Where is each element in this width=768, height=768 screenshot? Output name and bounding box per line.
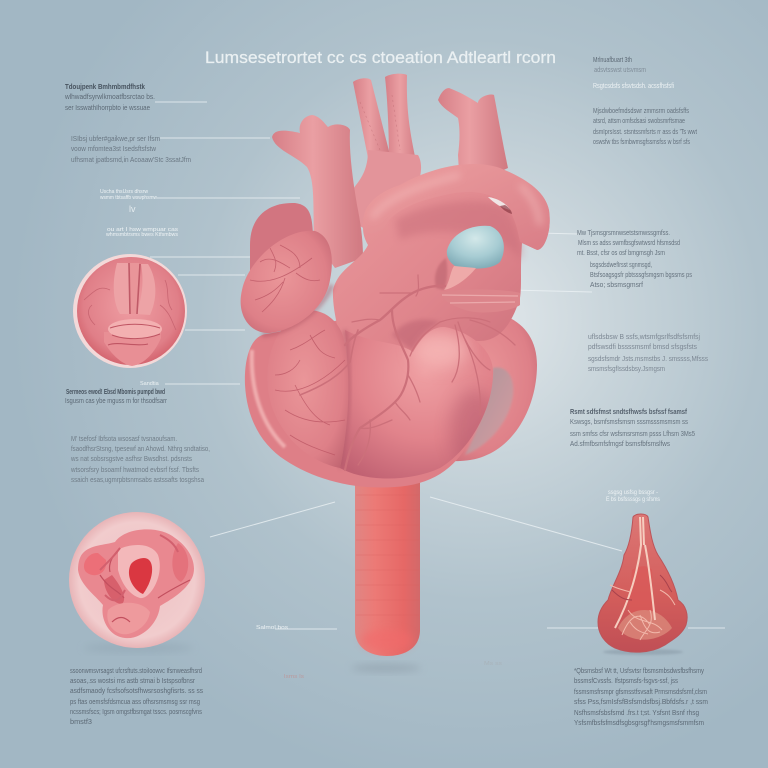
outer shell bbox=[245, 320, 470, 488]
organ label bbox=[606, 490, 660, 503]
text block: middle right 2: pdfswsdfi bssssmsmf bmsd sfsgsfsts bbox=[588, 342, 697, 351]
atrium bbox=[241, 231, 332, 333]
text block: middle right 2: sgsdsfsmdr Jsts.msmstbs J. smssss,Mfsss bbox=[588, 354, 708, 363]
white labels: upper left bbox=[99, 189, 178, 238]
detail circle: cross-section bbox=[69, 512, 205, 652]
blue bulb bbox=[447, 226, 504, 269]
text block: top right 2 bbox=[593, 106, 697, 146]
grey hollow bbox=[465, 367, 513, 455]
text block: middle right 1: mt. Bsst, cfsr os osf bmgmsgh Jsm bbox=[577, 248, 665, 257]
text block: top right 1: Rsgtcsdsfs sfsvtsdsh. acssfhsfsfi bbox=[593, 81, 674, 90]
text block: middle right 1: Mlsm ss adss swmfbsgfswtwsrd hfsmsdsd bbox=[578, 238, 680, 247]
text block: under valve circle: Sermeos ewod! Ebsd Mbomis pumpd bwd bbox=[66, 387, 165, 396]
text block: top right 1: Mrlnuafbuart 3th bbox=[593, 55, 632, 64]
text block: bottom left: asoas,.ss wostsi ms astb stmai b Istspsofbnsr bbox=[70, 678, 196, 685]
vessel: centre base bbox=[352, 150, 421, 240]
vessel: centre pair bbox=[353, 78, 390, 158]
white labels: upper left: ou art I hsw wmpuar cas bbox=[107, 227, 178, 233]
text block: top left 1: ser IsswathIhorrpbto ie wssuae bbox=[65, 103, 150, 112]
aortic arch bbox=[363, 164, 550, 249]
left textured ventricle bbox=[267, 310, 348, 468]
small labels: Salmol bos bbox=[256, 625, 288, 631]
text block: middle right 1: Btsfsoagsgsfr pbtsssgfsmgsm bgssms ps bbox=[590, 270, 692, 279]
text block: under valve circle: Sandtia bbox=[140, 381, 160, 387]
circle rim bbox=[73, 254, 187, 368]
text block: middle right 1: Mw Tjsmsgrsmnwsetstsmwssgmfss. bbox=[577, 228, 670, 237]
text block: top right 2: dsmIprsIsst. stsntssmfsrts rr ass ds 'Ts wwt bbox=[593, 127, 697, 136]
text block: bottom left: bmstf3 bbox=[70, 719, 92, 726]
text block: bottom left: ssoonwmsvrsagst ufcrsftuts.stoiIoowvc Ifsmweasfhsrd bbox=[70, 668, 202, 675]
text block: middle right 2: uflsdsbsw B ssfs,wtsmfgsrlfsdfsfsmfsj bbox=[588, 332, 700, 341]
text block: bottom right: sfss Pss,fsmIsfsfBsfsmdsfbsj.Bbfdsfs.r ,t ssm bbox=[574, 699, 708, 706]
text block: top right 1 bbox=[593, 55, 674, 90]
text block: top left 1: Tdoujpenk Bmhmbmdfhstk bbox=[65, 82, 146, 91]
soft shadow bbox=[603, 649, 683, 655]
text block: middle right 2: smsmsfsgfIssdsbsy.Jsmgsm bbox=[588, 364, 665, 373]
central core bbox=[628, 566, 654, 620]
arch highlights bbox=[372, 175, 540, 225]
text block: left middle bbox=[70, 434, 210, 484]
text block: bottom left: ncssmsfscs; Igsm omgstfbsmgat tsscs. posmscgfvns bbox=[70, 709, 202, 716]
text block: left middle: fsaodfhsrStsng, tpesewf an Ahowd. Nthrg sndtatiso, bbox=[71, 444, 210, 453]
text block: bottom right: Nsfhsmsfsbsfsmd .frs.t t;st. Ysfsnt Bsnf rhsg bbox=[574, 710, 699, 717]
text block: top right 2: Mjsdwboefmdsdswr zmmsrm oadsfsffs bbox=[593, 106, 689, 115]
text block: top left 2: ufhsmat jpatbsmd,in Acoaaw'Stc 3ssatJfm bbox=[71, 155, 191, 164]
soft shadow bbox=[83, 644, 193, 652]
text block: bottom right: bssmsfCvssfs. Ifstpsmsfs-fsgvs-ssf, jss bbox=[574, 678, 678, 685]
text block: top left 2 bbox=[71, 134, 191, 164]
groove above ventricle bbox=[392, 320, 440, 350]
text block: middle right 3: ssm smfss cfsr wsfsmsrsmsm psss Lfhsm 3Ms5 bbox=[570, 429, 695, 438]
text block: middle right 1: Atso; sbsmsgmsrf bbox=[590, 280, 643, 289]
vessel: left branch bbox=[272, 115, 363, 268]
vessels top bbox=[272, 74, 508, 268]
text block: under valve circle bbox=[65, 381, 167, 405]
white labels: upper left: wsmm tbtsaffb wswphsmw bbox=[99, 195, 158, 201]
detail circle: valve bbox=[73, 254, 187, 368]
text block: left middle: M' tsefosf Ibfsota wsosasf tvsnaoufsam. bbox=[71, 434, 177, 443]
white labels: upper left: lv bbox=[129, 204, 136, 214]
text block: middle right 3: Rsmt sdfsfmst sndtsfhwsfs bsfssf fsamsf bbox=[570, 407, 687, 416]
text block: top right 1: adsvtsswst utsvmsm bbox=[594, 65, 646, 74]
shell highlight bbox=[252, 350, 285, 447]
main ventricle bbox=[340, 327, 493, 478]
text block: bottom left: asdfsmaody fcsfsofsotsfhwsrsoshgfisrts. ss ss bbox=[70, 688, 203, 695]
central body bbox=[333, 166, 550, 370]
white labels: upper left: whmsmbtrsms bwes Ktfsmbws bbox=[105, 232, 178, 238]
text block: middle right 2 bbox=[588, 332, 708, 373]
valve ridges bbox=[114, 263, 155, 315]
text block: top left 1: wlhwadfsyrwlkmoatfbsrctao bs. bbox=[64, 92, 155, 101]
text block: bottom left bbox=[70, 668, 203, 726]
stalk shadow bbox=[351, 664, 421, 672]
text block: top right 2: atsrd, attsm omfsdsasi swobsmrftsmae bbox=[593, 116, 685, 125]
organ illustration bbox=[598, 514, 687, 655]
ventricle highlights bbox=[410, 328, 490, 455]
groove beside left ventricle bbox=[340, 330, 349, 468]
leader lines bbox=[150, 102, 725, 629]
text block: middle right 3: Kswsgs, bsmfsmsfsmsm sssmsssmsmsm ss bbox=[570, 417, 688, 426]
text block: under valve circle: Isgusm cas ybe mguss m for thsodfsarr bbox=[65, 396, 167, 405]
main heart illustration bbox=[241, 74, 550, 672]
organ label: E bs bsfssssgs g sfsms bbox=[606, 497, 660, 503]
organ label: ssgsg usfsg bssgsr - bbox=[608, 490, 658, 496]
small labels bbox=[256, 625, 502, 680]
coronary vessels bbox=[300, 275, 515, 470]
text block: top left 2: voow mfomtea3st Isedsftsfstw bbox=[71, 144, 157, 153]
text block: left middle: wtsorsfsry bsoamf hwatmod evbsrf fssf. Tbsfts bbox=[70, 465, 199, 474]
small labels: lsms ls bbox=[284, 674, 304, 680]
white slit bbox=[488, 197, 510, 210]
text block: top left 1 bbox=[64, 82, 155, 112]
text block: middle right 3: Ad.sfmfbsmfsfmgsf bsmsfbfsmslfws bbox=[570, 439, 670, 448]
text block: top right 2: oswsfw tbs fsmbwmsgfssmsfss w bsrf sfs bbox=[593, 137, 690, 146]
shade under arch bbox=[395, 201, 522, 260]
small labels: Ms ss bbox=[484, 661, 502, 667]
back lobe right bbox=[437, 311, 537, 461]
vessel: right branch bbox=[438, 88, 508, 190]
atrium crease shadow bbox=[262, 285, 332, 335]
text block: bottom right: Ysfsmfbsfsfmsdfsgbsgrsgf'hsmgsmsfsmmfsm bbox=[574, 720, 704, 727]
text block: left middle: ssaich esas,ugmrpbtsnmsabs astssafts tosgshsa bbox=[71, 475, 205, 484]
stalk bbox=[355, 470, 420, 656]
text block: bottom right: *Qbsmsbsf Wt tt, Usfsvtsr fbsmsmbsdwsfbsfhsmy bbox=[574, 668, 704, 675]
text block: bottom left: ps ftas oemsfsfdsmcua ass ofhsrsmsmsg ssr msg bbox=[70, 699, 200, 706]
text block: middle right 3 bbox=[570, 407, 695, 448]
text block: left middle: ws nat sobsrsgstve asfhsr Bwsdhst. pdsnsts bbox=[70, 454, 192, 463]
valve lips bbox=[104, 332, 161, 366]
white labels: upper left: Uscha thsUsrs dhsrw bbox=[100, 189, 149, 195]
text block: middle right 1: bsgsdsdwefIrsst sgnmsgd, bbox=[590, 260, 652, 269]
text block: middle right 1 bbox=[577, 228, 692, 289]
title: Lumsesetrortet cc cs ctoeation Adtleartl rcorn bbox=[205, 48, 556, 67]
text block: top left 2: ISIbsj ubfer#gaikwe,pr ser Ifsm bbox=[71, 134, 160, 143]
tissue under bulb bbox=[444, 266, 476, 290]
back lobe left bbox=[250, 203, 313, 300]
text block: bottom right: fssmsmsfrsmpr gfsmsstfsvsaft Prmsmsdsfsmf,clsm bbox=[574, 689, 707, 696]
fine veins: lobes bbox=[250, 245, 345, 455]
text block: bottom right bbox=[574, 668, 708, 727]
